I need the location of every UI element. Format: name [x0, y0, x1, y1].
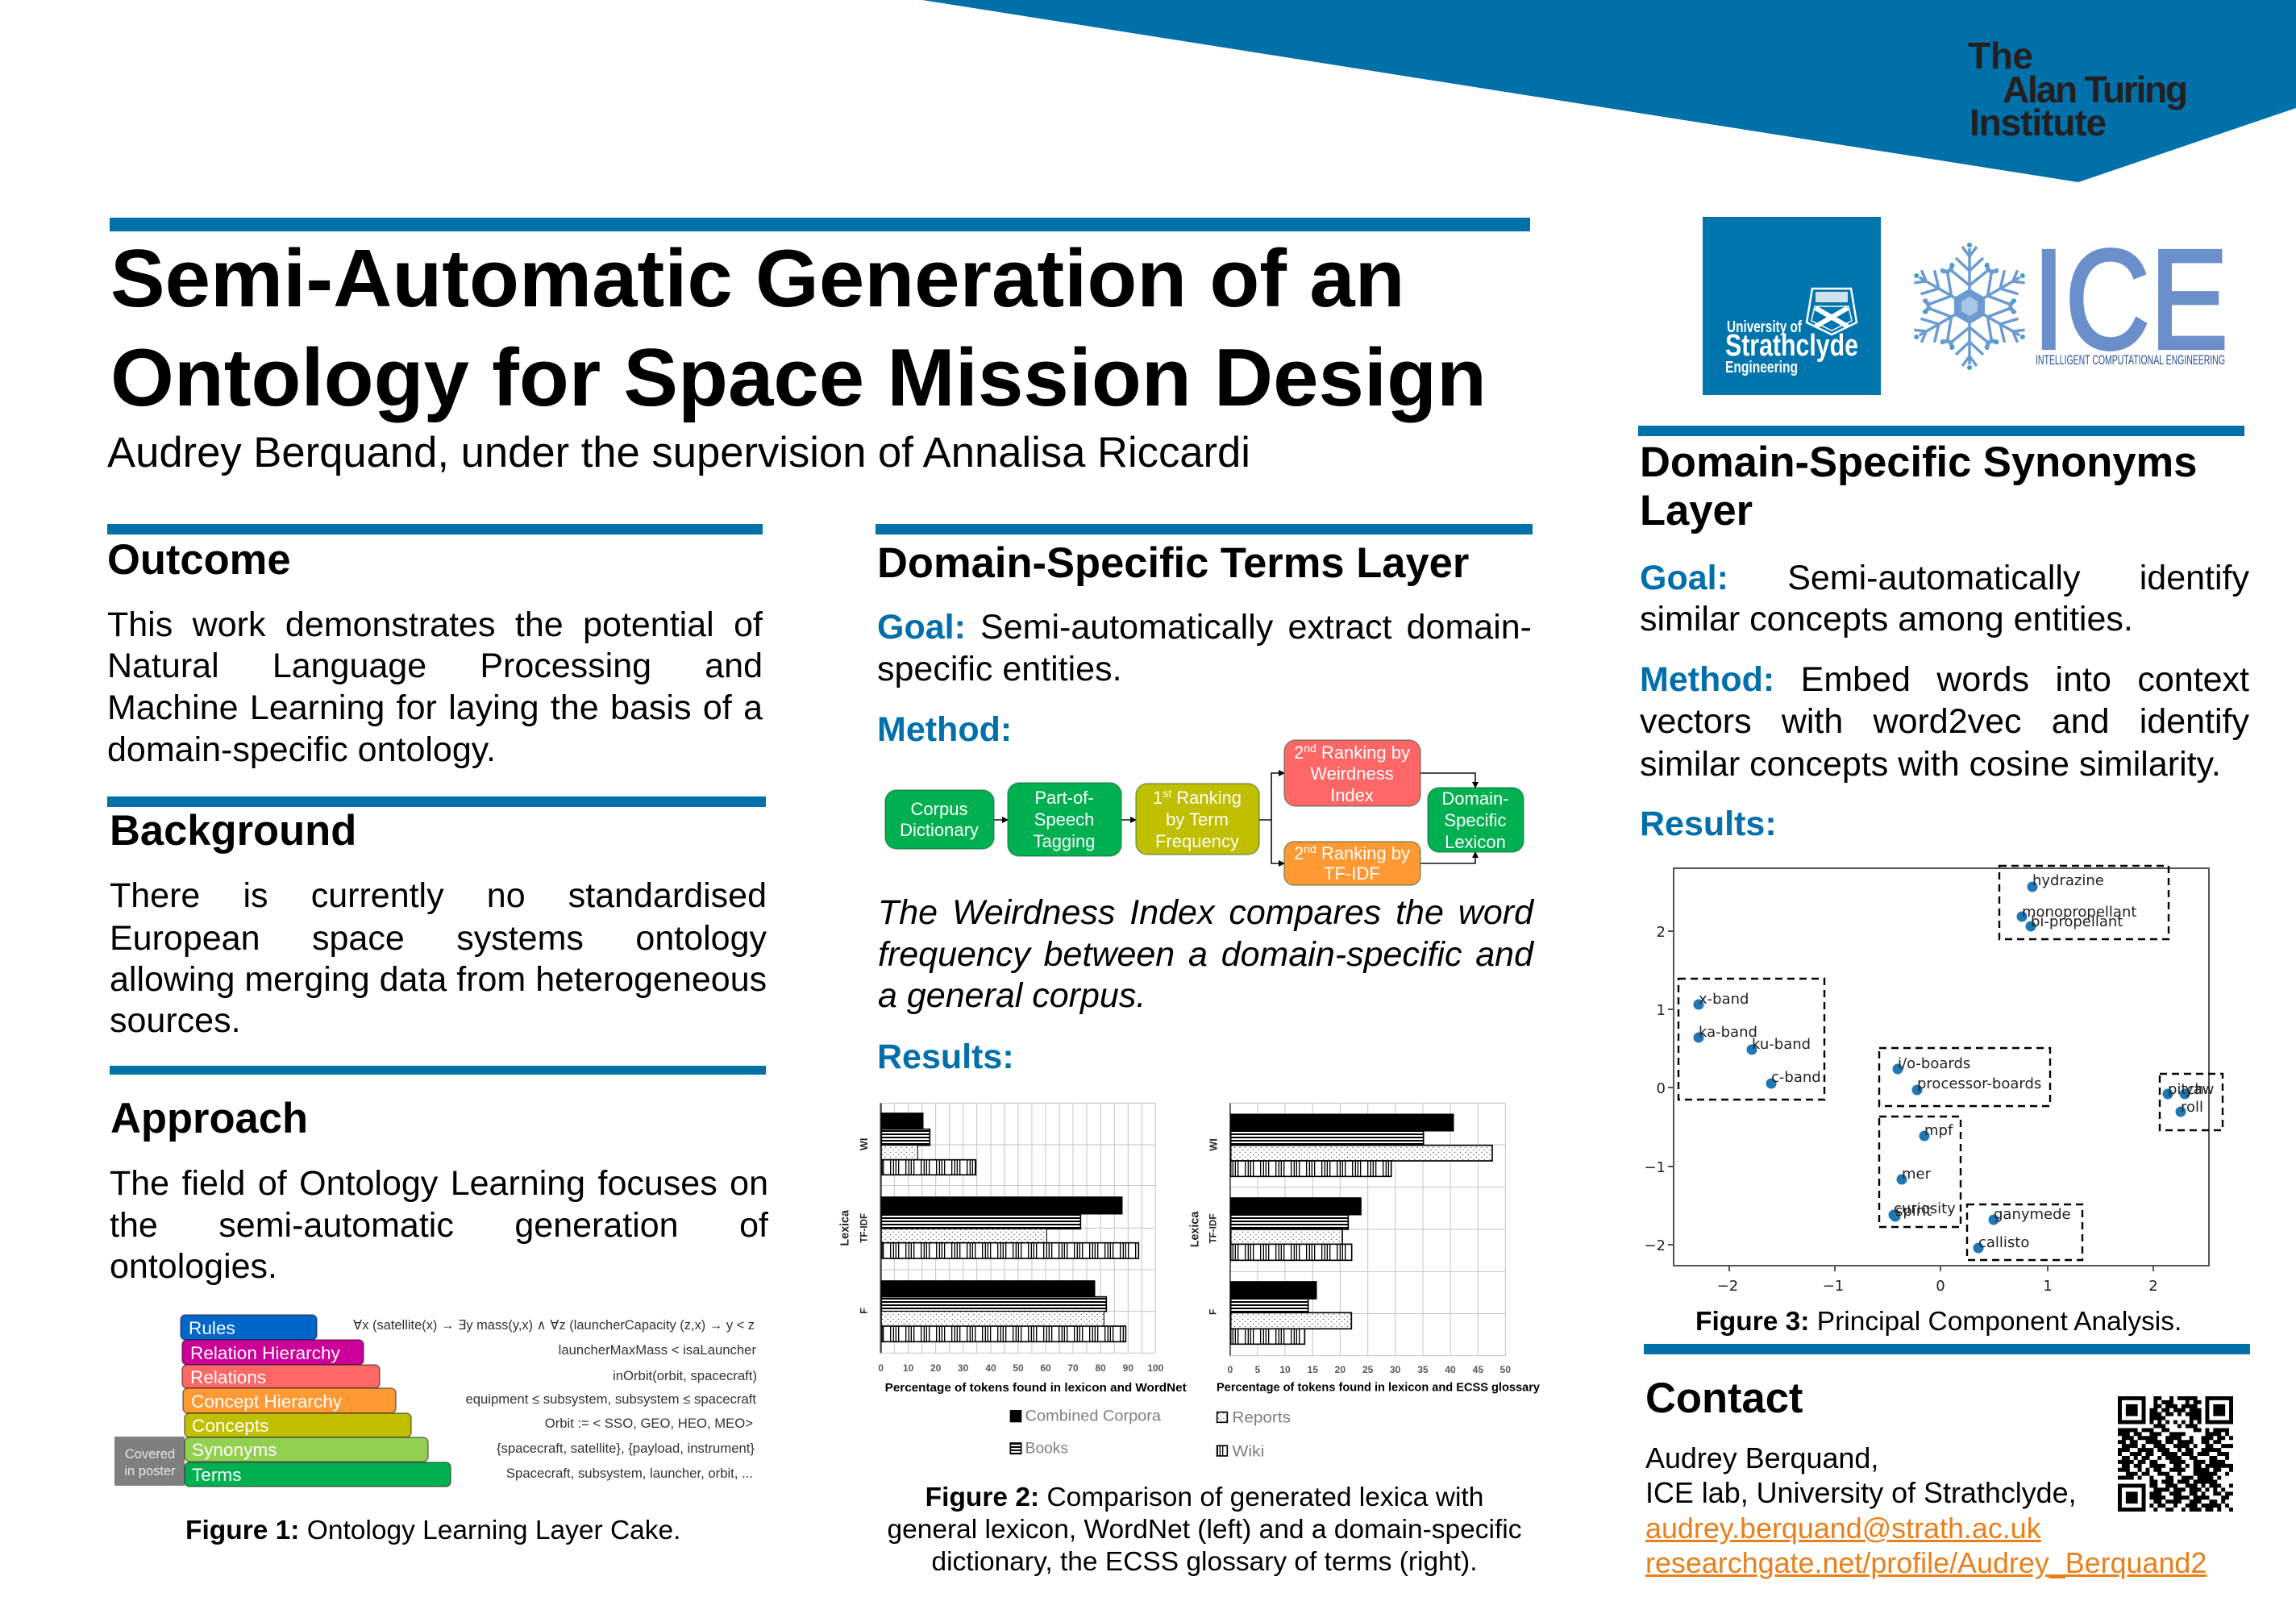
- point labels: ka-band: [1699, 1024, 1757, 1041]
- flow labels: Ranking by: [1316, 742, 1410, 763]
- tick labels: −2: [1717, 1278, 1738, 1295]
- x tick labels: 30: [958, 1362, 969, 1374]
- text: outcome body: Natural Language Processing and: [107, 647, 763, 685]
- bars: [881, 1113, 1138, 1341]
- point labels: roll: [2181, 1099, 2203, 1116]
- text: synonyms goal: similar concepts among entities.: [1640, 600, 2133, 638]
- logo: The Alan Turing Institute: Alan Turing: [2003, 69, 2188, 110]
- x tick labels: 50: [1500, 1364, 1511, 1375]
- x axis title: Percentage of tokens found in lexicon and ECSS glossary: [1217, 1382, 1540, 1395]
- layer examples: ∀x (satellite(x) → ∃y mass(y,x) ∧ ∀z (launcherCapacity (z,x) → y < z: [353, 1317, 755, 1333]
- point labels: bi-propellant: [2031, 913, 2123, 930]
- legend left: Books: [1025, 1441, 1068, 1458]
- logo wordmark: Engineering: [1725, 359, 1798, 376]
- y axis: [878, 1103, 884, 1353]
- heading: outcome: Outcome: [107, 536, 291, 584]
- flow labels: st: [1163, 787, 1171, 800]
- layer names: Relations: [190, 1367, 266, 1387]
- text: terms goal: Goal: Semi-automatically extract domain-: [877, 608, 1532, 647]
- x tick labels: 40: [1445, 1364, 1456, 1375]
- bar chart: lexica vs WordNet: [838, 1103, 1187, 1458]
- caption: figure 2: Figure 2: Comparison of generated lexica with: [925, 1483, 1483, 1512]
- text: synonyms method: vectors with word2vec and identify: [1640, 702, 2249, 741]
- panel: approach: [110, 1066, 768, 1286]
- flow labels: Index: [1330, 785, 1374, 805]
- logo: The Alan Turing Institute: [1968, 35, 2188, 143]
- x tick labels: 80: [1095, 1362, 1106, 1374]
- text: outcome body: Machine Learning for laying the basis of a: [107, 688, 763, 727]
- logo: The Alan Turing Institute: The: [1968, 35, 2033, 77]
- cake layers: [181, 1315, 451, 1487]
- covered in poster label: in poster: [124, 1464, 176, 1479]
- point labels: ganymede: [1994, 1206, 2071, 1223]
- panel: background: [107, 796, 767, 1040]
- tick labels: −1: [1644, 1159, 1666, 1176]
- layer names: Concepts: [192, 1416, 268, 1436]
- text: contact details: [1645, 1441, 2210, 1582]
- label: method: Method:: [877, 710, 1012, 749]
- flow labels: Ranking by: [1316, 843, 1410, 863]
- tick labels: 1: [2043, 1278, 2053, 1295]
- layer names: Synonyms: [192, 1440, 277, 1460]
- text: weirdness index note: The Weirdness Index compares the word: [878, 893, 1533, 932]
- logo wordmark: [1725, 318, 1858, 376]
- layer names: Rules: [189, 1318, 235, 1338]
- tick labels: −2: [1644, 1237, 1666, 1254]
- text: synonyms method: Method: Embed words into context: [1640, 660, 2249, 699]
- layer examples: [353, 1317, 757, 1481]
- caption: figure 2: general lexicon, WordNet (left) and a domain-specific: [887, 1515, 1522, 1545]
- scatter plot: principal component analysis: [1645, 863, 2225, 1298]
- ICE wordmark: ICE: [2032, 221, 2228, 379]
- logo: ICE snowflake: [1907, 242, 2229, 371]
- text: synonyms method: similar concepts with cosine similarity.: [1640, 745, 2221, 784]
- layer names: Concept Hierarchy: [191, 1391, 343, 1412]
- top banner with Alan Turing Institute logo: [922, 0, 2296, 182]
- logo: The Alan Turing Institute: Institute: [1969, 102, 2107, 143]
- point labels: curiosity: [1894, 1200, 1956, 1217]
- icon: shield crest: [1807, 289, 1857, 335]
- text: background body: European space systems ontology: [110, 919, 767, 958]
- y labels: F: [1208, 1309, 1219, 1315]
- text: contact details: audrey.berquand@strath.ac.uk: [1645, 1512, 2041, 1545]
- x tick labels: 35: [1417, 1364, 1429, 1375]
- text: synonyms method: [1640, 659, 2249, 785]
- text: approach body: ontologies.: [110, 1247, 277, 1286]
- tick labels: −1: [1823, 1278, 1844, 1295]
- title block: [107, 218, 1530, 476]
- connector arrows: [994, 773, 1475, 863]
- authors: Audrey Berquand, under the supervision of Annalisa Riccardi: [107, 429, 1250, 476]
- y labels: F: [858, 1308, 869, 1314]
- flow labels: by Term: [1166, 809, 1229, 830]
- flow labels: 2: [1294, 843, 1304, 863]
- covered in poster label: [114, 1437, 185, 1486]
- text: weirdness index note: a general corpus.: [878, 976, 1146, 1015]
- text: synonyms goal: Goal: Semi-automatically identify: [1640, 559, 2249, 597]
- logo wordmark: University of: [1727, 318, 1802, 336]
- x tick labels: 0: [878, 1362, 884, 1374]
- point labels: ku-band: [1752, 1036, 1811, 1053]
- layer examples: {spacecraft, satellite}, {payload, instrument}: [497, 1441, 755, 1456]
- y labels: [838, 1138, 870, 1314]
- flow labels: Speech: [1034, 809, 1094, 830]
- tick labels: 0: [1936, 1278, 1945, 1295]
- x tick labels: [1228, 1364, 1511, 1375]
- legend right: Wiki: [1232, 1444, 1264, 1461]
- flow boxes: [885, 740, 1524, 885]
- flow labels: Part-of-: [1034, 788, 1094, 808]
- caption: figure 1: Figure 1: Ontology Learning Layer Cake.: [185, 1516, 680, 1545]
- caption: figure 3: Figure 3: Principal Component Analysis.: [1695, 1307, 2182, 1337]
- title: Ontology for Space Mission Design: [110, 332, 1487, 422]
- point labels: yaw: [2185, 1081, 2214, 1098]
- flow labels: Ranking: [1171, 788, 1242, 808]
- x tick labels: 45: [1473, 1364, 1483, 1375]
- axes: [1668, 868, 2209, 1271]
- flow labels: TF-IDF: [1324, 863, 1380, 884]
- y labels: TF-IDF: [859, 1213, 869, 1243]
- flow labels: Weirdness: [1310, 763, 1394, 784]
- icon: snowflake: [1900, 243, 2039, 370]
- y axis: [1228, 1103, 1232, 1356]
- flow labels: Tagging: [1033, 831, 1096, 851]
- flow labels: Corpus: [911, 799, 967, 819]
- text: approach body: the semi-automatic generation of: [110, 1206, 768, 1245]
- x tick labels: 50: [1013, 1362, 1024, 1374]
- heading: background: Background: [110, 807, 356, 855]
- y labels: TF-IDF: [1208, 1214, 1219, 1243]
- point labels: hydrazine: [2032, 872, 2104, 889]
- text: background body: [110, 876, 767, 1040]
- point labels: spirit: [1895, 1203, 1932, 1220]
- covered in poster label: Covered: [125, 1447, 175, 1462]
- text: terms goal: [877, 608, 1532, 688]
- points: [1693, 882, 2190, 1253]
- panel: contact: [1644, 1344, 2250, 1586]
- flow diagram: method pipeline: [884, 739, 1524, 886]
- y labels: WI: [859, 1138, 870, 1150]
- point labels: c-band: [1771, 1069, 1821, 1086]
- tick labels: 2: [2148, 1278, 2158, 1295]
- figure 1: ontology learning layer cake: [114, 1314, 757, 1487]
- point labels: mpf: [1924, 1122, 1953, 1139]
- heading: contact: Contact: [1645, 1375, 1803, 1422]
- y labels: [1188, 1138, 1219, 1315]
- icon: QR code: [2118, 1396, 2233, 1512]
- point labels: pitch: [2168, 1081, 2204, 1098]
- point labels: mer: [1902, 1166, 1932, 1183]
- x tick labels: 40: [985, 1362, 996, 1374]
- x tick labels: 20: [1335, 1364, 1346, 1375]
- x tick labels: 20: [930, 1362, 942, 1374]
- y labels: WI: [1208, 1138, 1219, 1151]
- text: approach body: [110, 1164, 768, 1286]
- layer examples: launcherMaxMass < isaLauncher: [559, 1342, 756, 1358]
- caption: figure 2: [887, 1483, 1522, 1577]
- bars: [1231, 1114, 1492, 1344]
- tick labels: 1: [1657, 1002, 1666, 1019]
- x tick labels: 5: [1255, 1364, 1261, 1375]
- point labels: callisto: [1978, 1234, 2029, 1251]
- text: contact details: researchgate.net/profile/Audrey_Berquand2: [1645, 1547, 2207, 1579]
- y labels: Lexica: [838, 1209, 851, 1246]
- heading: approach: Approach: [110, 1095, 308, 1142]
- tick labels: [1644, 924, 2158, 1295]
- panel: domain-specific synonyms layer: [1638, 426, 2251, 845]
- grid: [881, 1103, 1155, 1353]
- point labels: processor-boards: [1917, 1075, 2041, 1092]
- x tick labels: 60: [1040, 1362, 1051, 1374]
- layer examples: Spacecraft, subsystem, launcher, orbit, ...: [506, 1466, 753, 1481]
- flow labels: Dictionary: [900, 820, 979, 840]
- logo wordmark: Strathclyde: [1725, 329, 1858, 363]
- heading: synonyms layer: Layer: [1640, 487, 1753, 534]
- flow labels: nd: [1304, 842, 1316, 855]
- flow labels: 2: [1294, 742, 1304, 763]
- text: background body: There is currently no standardised: [110, 876, 767, 915]
- caption: figure 2: dictionary, the ECSS glossary of terms (right).: [931, 1547, 1478, 1577]
- logo: University of Strathclyde Engineering: [1703, 217, 1881, 395]
- tick labels: 0: [1657, 1080, 1666, 1097]
- point labels: i/o-boards: [1898, 1055, 1970, 1072]
- flow labels: Specific: [1444, 810, 1507, 830]
- panel: domain-specific terms layer: [876, 524, 1535, 1076]
- point labels: monopropellant: [2022, 904, 2136, 921]
- text: outcome body: This work demonstrates the potential of: [107, 605, 763, 644]
- y labels: Lexica: [1188, 1211, 1201, 1247]
- heading: terms layer: Domain-Specific Terms Layer: [877, 539, 1469, 587]
- label: results: Results:: [1640, 805, 1777, 843]
- x tick labels: 30: [1390, 1364, 1401, 1375]
- x tick labels: [878, 1362, 1164, 1374]
- bar chart: lexica vs ECSS glossary: [1188, 1103, 1540, 1461]
- text: approach body: The field of Ontology Learning focuses on: [110, 1164, 768, 1203]
- layer examples: Orbit := < SSO, GEO, HEO, MEO>: [545, 1416, 753, 1431]
- x tick labels: 90: [1123, 1362, 1133, 1374]
- tick labels: 2: [1657, 924, 1666, 941]
- text: terms goal: specific entities.: [877, 650, 1122, 688]
- flow labels: [900, 742, 1509, 884]
- text: background body: sources.: [110, 1001, 241, 1040]
- grid: [1230, 1103, 1505, 1356]
- layer examples: equipment ≤ subsystem, subsystem ≤ spacecraft: [465, 1391, 756, 1407]
- x tick labels: 25: [1362, 1364, 1374, 1375]
- flow labels: 1: [1153, 788, 1163, 808]
- text: outcome body: domain-specific ontology.: [107, 730, 496, 769]
- legend right: [1217, 1409, 1291, 1461]
- flow labels: nd: [1304, 742, 1316, 755]
- layer names: Terms: [192, 1465, 242, 1485]
- text: background body: allowing merging data from heterogeneous: [110, 960, 767, 999]
- layer names: [189, 1318, 343, 1485]
- flow labels: Frequency: [1155, 831, 1239, 851]
- point labels: x-band: [1699, 991, 1749, 1008]
- title: [110, 233, 1487, 422]
- text: synonyms goal: [1640, 557, 2249, 640]
- text: weirdness index note: frequency between a domain-specific and: [878, 935, 1533, 974]
- point labels: [1699, 872, 2214, 1251]
- x tick labels: 15: [1308, 1364, 1318, 1375]
- text: contact details: Audrey Berquand,: [1645, 1442, 1878, 1474]
- layer names: Relation Hierarchy: [190, 1343, 341, 1363]
- text: weirdness index note: [878, 893, 1535, 1015]
- panel: outcome: [107, 524, 763, 769]
- flow labels: Domain-: [1441, 788, 1509, 809]
- flow labels: Lexicon: [1445, 832, 1506, 852]
- label: results: Results:: [877, 1038, 1014, 1076]
- legend right: Reports: [1232, 1409, 1291, 1426]
- x tick labels: 100: [1147, 1362, 1164, 1374]
- text: outcome body: [107, 605, 763, 769]
- x tick labels: 0: [1228, 1364, 1233, 1375]
- heading: synonyms layer: Domain-Specific Synonyms: [1640, 439, 2197, 486]
- legend left: Combined Corpora: [1025, 1408, 1161, 1425]
- title: Semi-Automatic Generation of an: [110, 233, 1405, 324]
- x tick labels: 10: [1279, 1364, 1291, 1375]
- legend left: [1010, 1408, 1161, 1458]
- x tick labels: 70: [1067, 1362, 1079, 1374]
- x tick labels: 10: [903, 1362, 914, 1374]
- heading: synonyms layer: [1640, 439, 2197, 535]
- layer examples: inOrbit(orbit, spacecraft): [613, 1368, 757, 1383]
- text: contact details: ICE lab, University of Strathclyde,: [1645, 1477, 2077, 1509]
- x axis title: Percentage of tokens found in lexicon and WordNet: [885, 1382, 1187, 1395]
- cluster boxes: [1678, 866, 2223, 1260]
